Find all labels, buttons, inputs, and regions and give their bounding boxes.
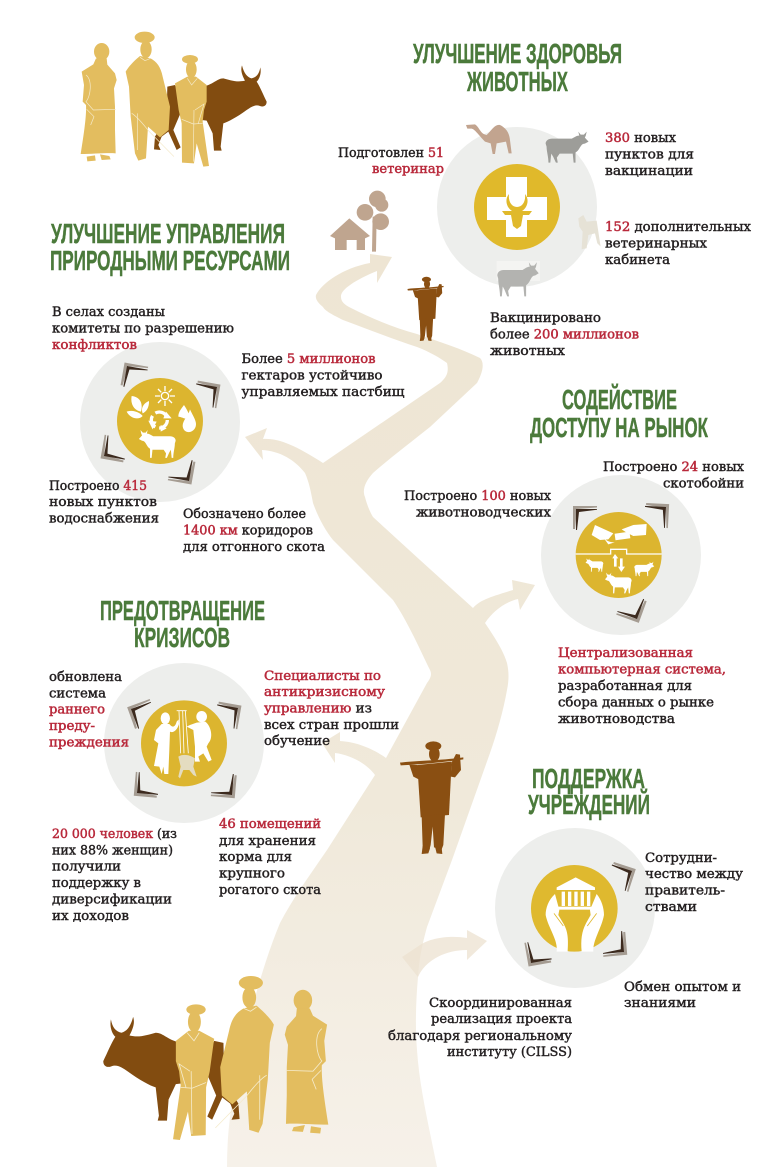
text: income diversification: поддержку в (52, 876, 141, 891)
heading: institutions: УЧРЕЖДЕНИЙ (528, 789, 650, 820)
text: coordinated implementation: институту (CILSS) (447, 1045, 572, 1060)
heading: animal health: УЛУЧШЕНИЕ ЗДОРОВЬЯ (413, 38, 622, 69)
heading: animal health (413, 38, 622, 97)
text: pastures: управляемых пастбищ (242, 385, 405, 400)
icon: animals (466, 124, 601, 296)
circle background (495, 828, 655, 988)
text: computer system: животноводства (558, 712, 675, 727)
text: computer system: компьютерная система, (558, 662, 726, 678)
text: vet offices: ветеринарных (605, 236, 708, 252)
text: slaughterhouses: скотобойни (663, 476, 744, 492)
icon: cross with bull (474, 164, 560, 250)
road (227, 254, 535, 1167)
text: coordinated implementation: благодаря региональному (388, 1029, 572, 1044)
text: income diversification: диверсификации (52, 892, 172, 908)
text: intergovernmental cooperation: правитель- (645, 884, 725, 898)
text: veterinarians: ветеринар (372, 162, 444, 177)
heading: natural resources: ПРИРОДНЫМИ РЕСУРСАМИ (50, 245, 290, 276)
circle background (437, 127, 597, 287)
icon: hands holding institution (531, 865, 618, 952)
chevrons (524, 862, 636, 966)
text: water points: Построено 415 (49, 479, 147, 494)
text: vaccination points: 380 новых (605, 131, 677, 146)
text: vet offices: кабинета (605, 253, 670, 268)
text: water points: водоснабжения (49, 512, 159, 526)
text: early warning: система (49, 686, 106, 702)
text: vaccinated animals: более 200 миллионов (490, 328, 639, 342)
panel: crisis prevention (49, 595, 399, 924)
text: corridors: для отгонного скота (183, 540, 325, 555)
heading: institutions (528, 763, 650, 820)
text: corridors (183, 507, 325, 555)
chevrons (127, 699, 241, 798)
text: water points (49, 479, 159, 526)
text: livestock markets: животноводческих (416, 506, 552, 520)
heading: natural resources: УЛУЧШЕНИЕ УПРАВЛЕНИЯ (51, 218, 285, 249)
panel: natural resources (49, 218, 405, 555)
icon: small herder (407, 277, 444, 341)
text: early warning: преду- (49, 719, 95, 734)
text: livestock markets (404, 489, 552, 520)
text: feed storage: для хранения (219, 834, 316, 849)
text: crisis specialists (264, 669, 399, 749)
text: income diversification: них 88% женщин) (52, 844, 173, 858)
text: intergovernmental cooperation: ствами (645, 900, 697, 915)
circle background (80, 342, 240, 502)
text: vaccinated animals (490, 311, 639, 359)
text: corridors: 1400 км коридоров (183, 524, 313, 538)
text: vaccination points: вакцинации (605, 164, 693, 179)
text: crisis specialists: всех стран прошли (264, 718, 399, 733)
panel: market access (404, 384, 745, 727)
text: pastures (242, 352, 405, 400)
arrow: institutions branch (402, 930, 487, 977)
heading: animal health: ЖИВОТНЫХ (466, 66, 568, 97)
text: vet offices (605, 220, 752, 268)
heading: market access: СОДЕЙСТВИЕ (562, 384, 677, 415)
text: crisis specialists: обучение (264, 734, 330, 749)
text: vet offices: 152 дополнительных (605, 220, 752, 235)
text: conflict committees (52, 305, 234, 353)
text: water points: новых пунктов (49, 495, 157, 510)
heading: crisis prevention (100, 595, 265, 653)
panel: institutions (388, 763, 743, 1060)
text: intergovernmental cooperation: Сотрудни- (645, 851, 717, 866)
text: computer system: Централизованная (558, 646, 693, 661)
icon: ecosystem (117, 378, 203, 464)
text: slaughterhouses: Построено 24 новых (603, 460, 745, 475)
text: livestock markets: Построено 100 новых (404, 489, 552, 504)
text: corridors: Обозначено более (183, 507, 306, 522)
text: conflict committees: конфликтов (52, 338, 137, 353)
text: feed storage: рогатого скота (219, 883, 321, 898)
text: coordinated implementation (388, 996, 572, 1060)
text: early warning: обновлена (49, 670, 122, 685)
heading: natural resources (50, 218, 290, 276)
text: vaccination points (605, 131, 694, 179)
text: knowledge exchange: знаниями (624, 996, 696, 1011)
text: early warning (49, 670, 129, 750)
text: intergovernmental cooperation: чество между (645, 867, 743, 882)
text: vaccination points: пунктов для (605, 148, 694, 162)
text: veterinarians: Подготовлен 51 (338, 146, 444, 161)
text: computer system: разработанная для (558, 679, 692, 694)
heading: crisis prevention: ПРЕДОТВРАЩЕНИЕ (100, 595, 265, 626)
text: veterinarians (338, 146, 444, 177)
heading: crisis prevention: КРИЗИСОВ (134, 622, 230, 653)
text: coordinated implementation: реализация проекта (431, 1012, 572, 1027)
text: income diversification: 20 000 человек (из (52, 827, 177, 842)
panel: animal health (338, 38, 752, 359)
icon: people with loom (141, 700, 227, 786)
chevrons (101, 363, 220, 484)
text: pastures: гектаров устойчиво (242, 368, 383, 384)
text: coordinated implementation: Скоординированная (429, 996, 572, 1011)
text: conflict committees: комитеты по разрешению (52, 322, 234, 336)
text: vaccinated animals: Вакцинировано (490, 311, 601, 326)
chevrons (573, 503, 669, 623)
icon: market exchange (576, 512, 662, 598)
text: income diversification (52, 827, 177, 924)
text: feed storage: корма для (219, 850, 292, 865)
people group: top (81, 32, 267, 167)
text: computer system: сбора данных о рынке (558, 696, 714, 710)
circle background (541, 475, 701, 635)
text: early warning: преждения (49, 736, 129, 750)
text: vaccinated animals: животных (490, 344, 566, 359)
text: slaughterhouses (603, 460, 745, 492)
heading: market access (530, 384, 708, 443)
text: early warning: раннего (49, 702, 105, 718)
text: income diversification: их доходов (52, 909, 129, 924)
icon: large herder (400, 741, 463, 854)
text: intergovernmental cooperation (645, 851, 743, 915)
icon: house and tree (330, 191, 389, 252)
heading: institutions: ПОДДЕРЖКА (532, 763, 645, 794)
text: feed storage (219, 817, 321, 898)
text: computer system (558, 646, 726, 727)
text: crisis specialists: антикризисному (264, 685, 385, 700)
people group: bottom (103, 976, 328, 1140)
text: knowledge exchange: Обмен опытом и (624, 980, 741, 995)
text: knowledge exchange (624, 980, 741, 1011)
text: income diversification: получили (52, 860, 121, 874)
text: feed storage: 46 помещений (219, 817, 321, 832)
text: conflict committees: В селах созданы (52, 305, 165, 320)
text: pastures: Более 5 миллионов (242, 352, 376, 367)
text: crisis specialists: управлению из (264, 702, 372, 716)
circle background (104, 663, 264, 823)
text: crisis specialists: Специалисты по (264, 669, 381, 684)
text: feed storage: крупного (219, 866, 285, 882)
